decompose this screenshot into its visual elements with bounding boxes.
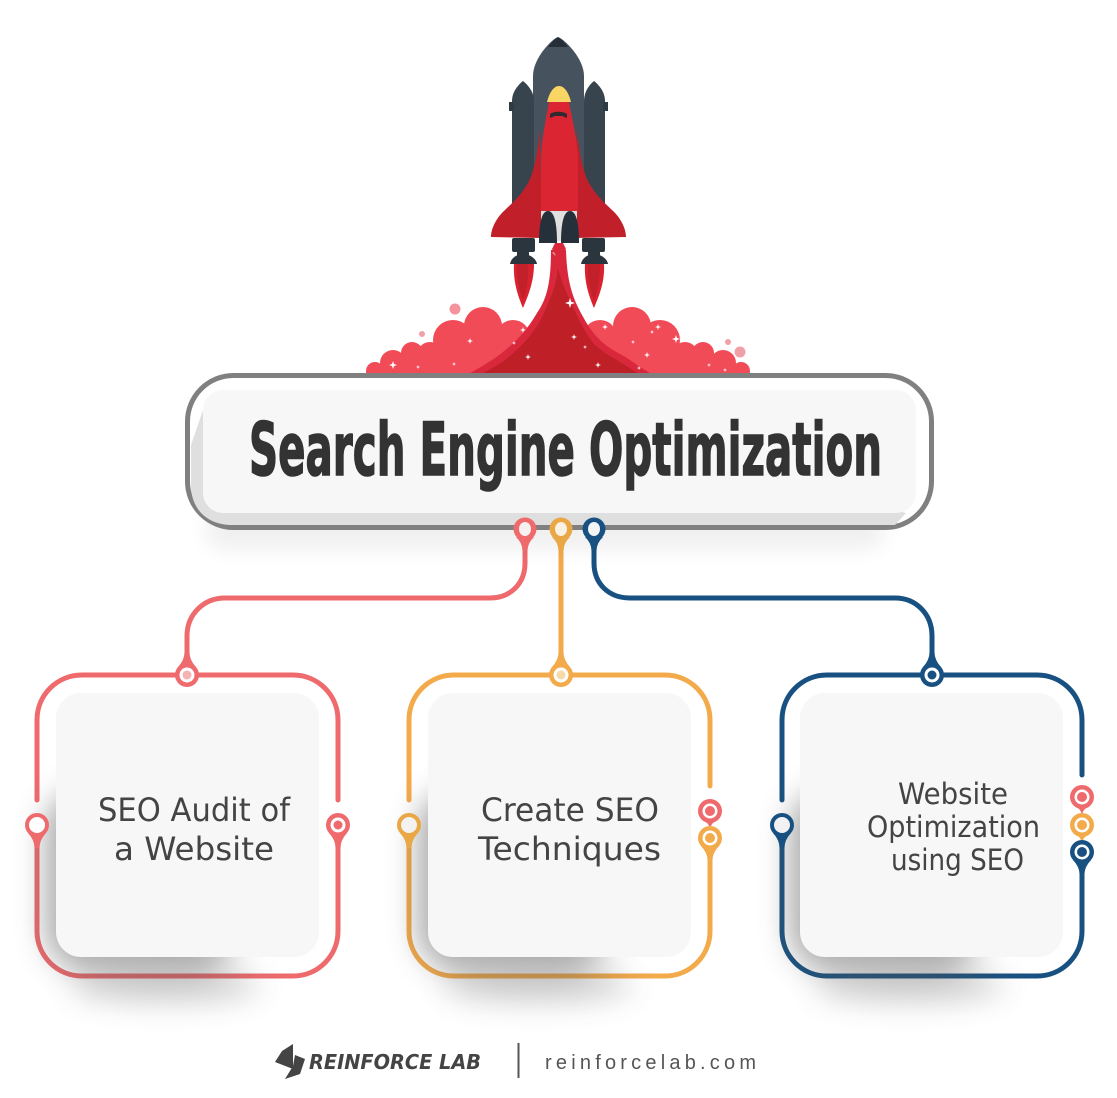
card 2 outline: [409, 675, 710, 976]
card 3 panel: [800, 693, 1063, 957]
card 3: Website Optimization: [770, 652, 1094, 1001]
card 2 text: [477, 791, 661, 868]
node right: [326, 813, 350, 848]
website: reinforcelab.com: [545, 1052, 756, 1074]
card 1 lower shadow: [70, 969, 260, 1001]
node top: [549, 652, 573, 687]
logo icon: [275, 1044, 305, 1079]
card 2 text: Create SEO: [481, 791, 659, 829]
box inner shade: [191, 410, 906, 525]
card 1: SEO Audit: [25, 652, 350, 1001]
exhaust plume: [465, 250, 655, 376]
card 2 panel: [428, 693, 691, 957]
node left: [25, 813, 49, 848]
card 1 shadow: [46, 790, 236, 970]
pin: red: [514, 518, 536, 551]
divider: [518, 1043, 520, 1078]
main title box: [188, 376, 932, 550]
node right red: [698, 799, 722, 828]
node left: [770, 813, 794, 848]
exhaust cloud: [366, 304, 750, 380]
connector lines: [187, 535, 932, 670]
footer: [275, 1043, 756, 1079]
left booster: [509, 81, 537, 264]
card 3 text: Optimization: [867, 810, 1040, 844]
card 1 panel: [56, 693, 319, 957]
card 3 lower shadow: [814, 969, 1004, 1001]
card 2 lower shadow: [442, 969, 632, 1001]
right booster: [581, 81, 608, 264]
box panel: [203, 390, 916, 513]
orbiter: [491, 86, 626, 256]
card 1 text: SEO Audit of: [98, 791, 291, 829]
card 2 shadow: [418, 790, 608, 970]
side flames: [514, 264, 604, 308]
card 3 text: [867, 777, 1040, 877]
box shadow: [205, 510, 885, 550]
central tank: [533, 37, 584, 205]
node right orange: [698, 826, 722, 860]
card 3 text: using SEO: [891, 843, 1024, 877]
node right red: [1070, 785, 1094, 814]
rocket illustration: [366, 37, 750, 380]
connector: orange: [558, 535, 564, 670]
pin: orange: [550, 518, 572, 551]
card 1 outline: [37, 675, 338, 976]
card 3 shadow: [790, 790, 980, 970]
pin: navy: [582, 518, 606, 551]
card 3 text: Website: [898, 777, 1008, 811]
card 1 text: [98, 791, 291, 868]
card 3 outline: [782, 675, 1082, 976]
node right orange: [1070, 813, 1094, 842]
card 1 text: a Website: [114, 830, 274, 868]
node top: [920, 652, 944, 687]
node right navy: [1070, 840, 1094, 874]
sparkles: [389, 250, 727, 372]
connector: red: [187, 535, 525, 670]
node left: [397, 813, 421, 848]
box outline: [188, 376, 932, 528]
box connector pins: [514, 518, 606, 551]
card 2: Create SEO: [397, 652, 722, 1001]
connector: navy: [594, 535, 932, 670]
node top: [175, 652, 199, 687]
logo wordmark: REINFORCE LAB: [309, 1050, 481, 1074]
card 2 text: Techniques: [477, 830, 661, 868]
